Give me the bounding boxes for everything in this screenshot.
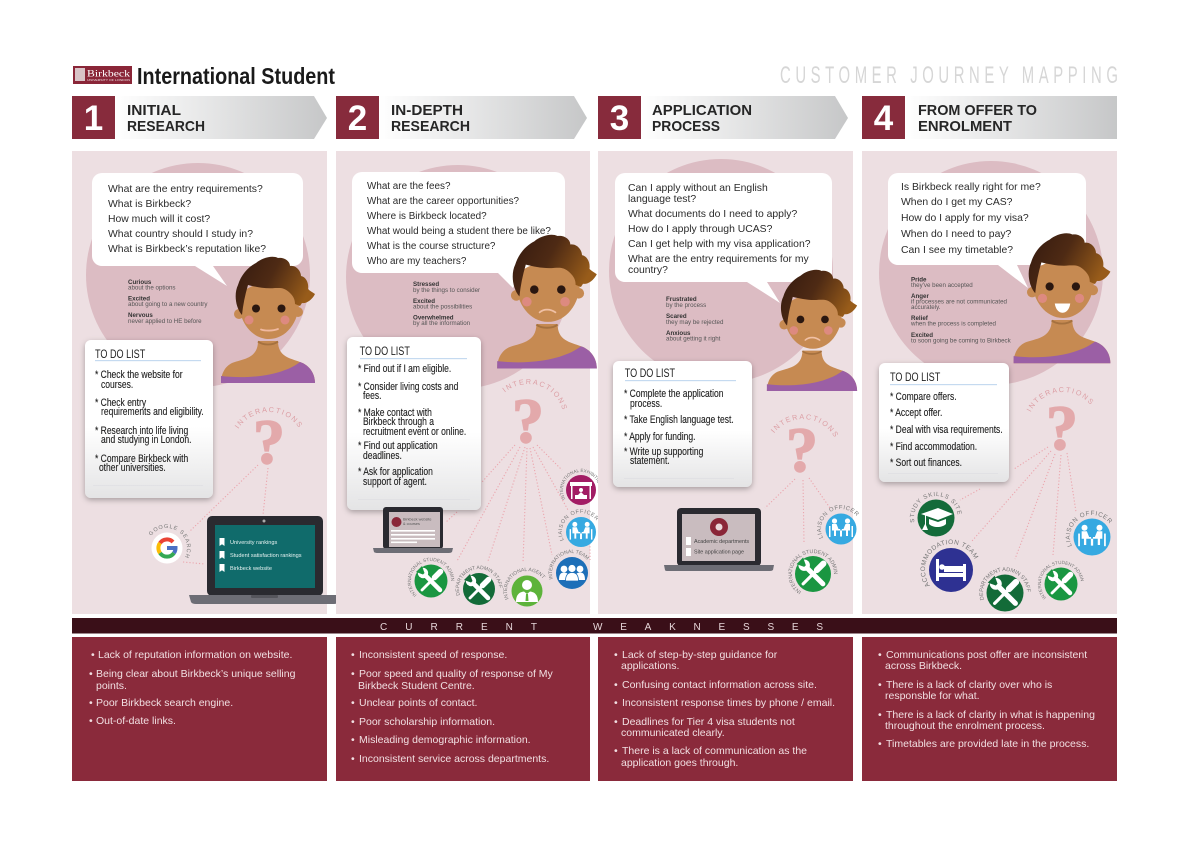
- to do list: Birkbeck through a: [363, 416, 435, 428]
- icon: international student admin: INTERNATIONAL STUDENT ADMIN: [1038, 560, 1084, 600]
- to do list: * Ask for application: [358, 466, 433, 478]
- interactions: [502, 379, 567, 456]
- step 3 header: [598, 96, 848, 139]
- weaknesses: application process: •: [614, 716, 618, 728]
- to do list: * Find out application: [358, 440, 438, 452]
- to do list: fees.: [363, 390, 381, 402]
- weaknesses: in-depth research: •: [351, 668, 355, 680]
- icon: department admin staff: DEPARTMENT ADMIN STAFF: [979, 567, 1031, 600]
- to do list: and studying in London.: [101, 434, 191, 446]
- weaknesses: application process: •: [614, 745, 618, 757]
- to do list: * Write up supporting: [624, 446, 703, 458]
- student: smiling: [221, 257, 315, 383]
- student: frowning: [497, 235, 597, 369]
- to do list: [879, 363, 1009, 482]
- to do list: * Make contact with: [358, 407, 432, 419]
- laptop: search results: [189, 516, 340, 604]
- weaknesses: from offer to enrolment: There is a lack of clarity in what is happening: [886, 709, 1095, 721]
- feelings: by the things to consider: [413, 287, 480, 294]
- speech bubble: questions: What are the fees?: [367, 181, 451, 192]
- step 1 header: INITIAL: [127, 102, 181, 119]
- to do list: * Check entry: [95, 397, 146, 409]
- to do list: * Sort out finances.: [890, 457, 962, 469]
- weaknesses: in-depth research: Poor scholarship information.: [359, 716, 495, 728]
- speech bubble: questions: language test?: [628, 194, 696, 205]
- interactions: ?: [512, 385, 544, 456]
- icon: international team: INTERNATIONAL TEAM: [548, 550, 590, 580]
- feelings: [910, 276, 1012, 344]
- speech bubble: questions: How much will it cost?: [108, 214, 210, 225]
- icon: study skills site: [910, 492, 962, 536]
- to do list: * Complete the application: [624, 388, 723, 400]
- feelings: about the options: [128, 284, 175, 292]
- icon: liaison officer: LIAISON OFFICER: [1066, 510, 1112, 547]
- weaknesses: initial research: •: [89, 715, 93, 727]
- to do list: [613, 361, 752, 487]
- step 1 header: [72, 96, 327, 139]
- feelings: by all the information: [413, 320, 471, 327]
- feelings: if processes are not communicated: [911, 298, 1008, 306]
- to do list: process.: [630, 398, 662, 410]
- speech bubble: questions: Is Birkbeck really right for me?: [901, 182, 1041, 193]
- weaknesses: from offer to enrolment: •: [878, 709, 882, 721]
- student: frowning: [767, 270, 857, 391]
- feelings: to soon going be coming to Birkbeck: [911, 338, 1012, 344]
- weaknesses: from offer to enrolment: There is a lack of clarity over who is: [886, 679, 1052, 691]
- laptop: application: [664, 508, 774, 571]
- icon: international agent: INTERNATIONAL AGENT: [504, 568, 546, 600]
- laptop: search results: Birkbeck website: [230, 566, 272, 572]
- panel: application process: [598, 151, 859, 614]
- interactions: [764, 414, 838, 542]
- laptop: website: [373, 507, 453, 553]
- weaknesses: application process: •: [614, 649, 618, 661]
- weaknesses: in-depth research: Unclear points of contact.: [359, 697, 477, 709]
- weaknesses: from offer to enrolment: across Birkbeck.: [885, 660, 962, 672]
- step 4 header: ENROLMENT: [918, 118, 1012, 135]
- band: current weaknesses: CURRENT: [380, 622, 537, 633]
- interactions: ?: [1046, 392, 1078, 463]
- logo: Birkbeck: UNIVERSITY OF LONDON: [87, 78, 130, 82]
- subtitle: CUSTOMER JOURNEY MAPPING: [780, 63, 1118, 89]
- to do list: TO DO LIST: [890, 372, 941, 384]
- speech bubble: questions: When do I need to pay?: [901, 229, 1012, 240]
- weaknesses: in-depth research: •: [351, 753, 355, 765]
- laptop: search results: Student satisfaction rankings: [230, 553, 302, 559]
- to do list: * Find accommodation.: [890, 441, 977, 453]
- weaknesses: from offer to enrolment: •: [878, 738, 882, 750]
- to do list: other universities.: [99, 462, 166, 474]
- step 2 header: 2: [348, 99, 367, 138]
- speech bubble: questions: What documents do I need to apply?: [628, 209, 797, 220]
- weaknesses: initial research: •: [89, 668, 93, 680]
- weaknesses: from offer to enrolment: •: [878, 649, 882, 661]
- feelings: they may be rejected: [666, 319, 724, 326]
- feelings: Excited: [911, 332, 933, 339]
- to do list: courses.: [101, 379, 133, 391]
- to do list: support of agent.: [363, 476, 427, 488]
- weaknesses: in-depth research: •: [351, 649, 355, 661]
- feelings: [413, 281, 480, 327]
- icon: international student admin: INTERNATIONAL STUDENT ADMIN: [408, 558, 454, 597]
- feelings: about going to a new country: [128, 301, 208, 308]
- laptop: application: Site application page: [694, 550, 744, 556]
- feelings: [666, 296, 724, 342]
- weaknesses: application process: •: [614, 679, 618, 691]
- weaknesses: in-depth research: •: [351, 716, 355, 728]
- feelings: by the process: [666, 302, 706, 309]
- speech bubble: questions: [888, 173, 1086, 288]
- weaknesses: in-depth research: Birkbeck Student Centre.: [358, 680, 475, 692]
- weaknesses: in-depth research: Inconsistent service across departments.: [359, 753, 549, 765]
- weaknesses: from offer to enrolment: throughout the enrolment process.: [885, 720, 1045, 732]
- speech bubble: questions: Can I see my timetable?: [901, 245, 1013, 256]
- weaknesses: application process: Inconsistent response times by phone / email.: [622, 697, 835, 709]
- interactions: [960, 387, 1094, 560]
- interactions: INTERACTIONS: [502, 379, 567, 410]
- step 1 header: RESEARCH: [127, 118, 205, 135]
- weaknesses: from offer to enrolment: responsble for what.: [885, 690, 980, 702]
- feelings: about the possibilities: [413, 304, 472, 310]
- weaknesses: initial research: [72, 637, 327, 781]
- weaknesses: application process: application goes through.: [621, 757, 738, 769]
- weaknesses: from offer to enrolment: •: [878, 679, 882, 691]
- interactions: INTERACTIONS: [1026, 387, 1094, 412]
- feelings: when the process is completed: [910, 320, 997, 328]
- to do list: statement.: [630, 455, 670, 467]
- to do list: * Research into life living: [95, 425, 188, 437]
- weaknesses: initial research: Poor Birkbeck search engine.: [96, 697, 233, 709]
- speech bubble: questions: country?: [628, 265, 668, 276]
- weaknesses: from offer to enrolment: [862, 637, 1117, 781]
- feelings: Overwhelmed: [413, 314, 454, 322]
- feelings: Anxious: [666, 330, 691, 337]
- speech bubble: questions: Can I get help with my visa application?: [628, 239, 811, 250]
- speech bubble: questions: [352, 172, 565, 288]
- feelings: [128, 279, 208, 325]
- panel: from offer to enrolment: [862, 151, 1117, 614]
- laptop: website: Birkbeck website: [403, 518, 432, 522]
- interactions: [183, 406, 302, 564]
- icon: study skills site: STUDY SKILLS SITE: [910, 492, 962, 522]
- laptop: website: & courses: [403, 522, 420, 526]
- speech bubble: questions: Can I apply without an English: [628, 183, 768, 194]
- weaknesses: from offer to enrolment: Timetables are provided late in the process.: [886, 738, 1089, 750]
- speech bubble: questions: What are the entry requirements for my: [628, 254, 810, 265]
- feelings: Relief: [911, 315, 929, 322]
- step 4 header: 4: [874, 99, 894, 138]
- panel: in-depth research: [336, 151, 598, 614]
- feelings: Pride: [911, 276, 927, 284]
- feelings: Scared: [666, 313, 687, 320]
- interactions: INTERACTIONS: [234, 407, 302, 428]
- weaknesses: in-depth research: Poor speed and quality of response of My: [359, 668, 554, 680]
- step 2 header: [336, 96, 587, 139]
- interactions: ?: [253, 406, 285, 477]
- to do list: TO DO LIST: [360, 346, 410, 358]
- speech bubble: questions: [615, 173, 832, 303]
- feelings: Anger: [911, 293, 929, 300]
- feelings: Curious: [128, 279, 152, 286]
- weaknesses: initial research: points.: [96, 680, 127, 692]
- icon: liaison officer: LIAISON OFFICER: [558, 509, 598, 542]
- weaknesses: initial research: •: [91, 649, 95, 661]
- weaknesses: application process: Lack of step-by-step guidance for: [622, 649, 778, 661]
- weaknesses: in-depth research: •: [351, 734, 355, 746]
- icon: liaison officer: LIAISON OFFICER: [817, 505, 859, 539]
- feelings: Excited: [128, 296, 150, 302]
- feelings: Stressed: [413, 281, 439, 288]
- speech bubble: questions: How do I apply for my visa?: [901, 213, 1029, 224]
- weaknesses: application process: Confusing contact information across site.: [622, 679, 817, 691]
- feelings: accurately.: [911, 304, 941, 311]
- laptop: search results: University rankings: [230, 540, 277, 546]
- to do list: * Deal with visa requirements.: [890, 424, 1003, 436]
- weaknesses: initial research: •: [89, 697, 93, 709]
- feelings: Frustrated: [666, 296, 697, 303]
- weaknesses: application process: There is a lack of communication as the: [622, 745, 807, 757]
- icon: international exhibition: INTERNATIONAL EXHIBITION: [560, 468, 598, 500]
- to do list: * Take English language test.: [624, 414, 734, 426]
- weaknesses: from offer to enrolment: Communications post offer are inconsistent: [886, 649, 1087, 661]
- panel: initial research: [72, 151, 336, 614]
- speech bubble: questions: Where is Birkbeck located?: [367, 211, 487, 222]
- weaknesses: in-depth research: Misleading demographic information.: [359, 734, 531, 746]
- weaknesses: in-depth research: [336, 637, 590, 781]
- feelings: Nervous: [128, 312, 153, 319]
- weaknesses: initial research: Lack of reputation information on website.: [98, 649, 292, 661]
- icon: international student admin: INTERNATIONAL STUDENT ADMIN: [788, 549, 838, 594]
- step 4 header: [862, 96, 1117, 139]
- step 3 header: PROCESS: [652, 118, 720, 135]
- step 3 header: 3: [610, 99, 629, 138]
- interactions: ?: [786, 414, 818, 485]
- speech bubble: questions: What is Birkbeck?: [108, 199, 191, 210]
- weaknesses: in-depth research: •: [351, 697, 355, 709]
- to do list: * Find out if I am eligible.: [358, 363, 451, 375]
- logo: Birkbeck: [73, 66, 132, 84]
- weaknesses: initial research: Out-of-date links.: [96, 715, 176, 727]
- to do list: requirements and eligibility.: [101, 406, 204, 418]
- to do list: * Compare Birkbeck with: [95, 453, 188, 465]
- band: current weaknesses: WEAKNESSES: [593, 622, 823, 633]
- weaknesses: application process: Deadlines for Tier 4 visa students not: [622, 716, 795, 728]
- speech bubble: questions: [92, 173, 303, 286]
- icon: department admin staff: DEPARTMENT ADMIN STAFF: [456, 566, 502, 596]
- to do list: * Consider living costs and: [358, 381, 458, 393]
- to do list: * Check the website for: [95, 369, 183, 381]
- feelings: Excited: [413, 298, 435, 305]
- feelings: never applied to HE before: [128, 318, 202, 325]
- student: happy: [1014, 233, 1110, 363]
- to do list: [347, 337, 481, 510]
- to do list: deadlines.: [363, 450, 402, 462]
- step 4 header: FROM OFFER TO: [918, 102, 1037, 119]
- interaction lines: [446, 445, 590, 563]
- band: current weaknesses: [72, 618, 1117, 634]
- speech bubble: questions: What are the entry requirements?: [108, 184, 263, 195]
- logo: Birkbeck: Birkbeck: [87, 70, 130, 80]
- weaknesses: application process: applications.: [621, 660, 679, 672]
- to do list: TO DO LIST: [95, 349, 146, 361]
- to do list: * Apply for funding.: [624, 431, 696, 443]
- speech bubble: questions: How do I apply through UCAS?: [628, 224, 773, 235]
- step 2 header: RESEARCH: [391, 118, 470, 135]
- to do list: * Compare offers.: [890, 391, 957, 403]
- speech bubble: questions: What is Birkbeck’s reputation like?: [108, 244, 266, 255]
- icon: accommodation team: ACCOMMODATION TEAM: [920, 540, 978, 586]
- speech bubble: questions: Who are my teachers?: [367, 256, 467, 267]
- to do list: [85, 340, 213, 498]
- speech bubble: questions: What country should I study in?: [108, 229, 253, 240]
- weaknesses: initial research: Being clear about Birkbeck’s unique selling: [96, 668, 296, 680]
- to do list: recruitment event or online.: [363, 426, 466, 438]
- icon: google search: GOOGLE SEARCH: [149, 524, 191, 558]
- weaknesses: application process: communicated clearly.: [621, 727, 725, 739]
- to do list: * Accept offer.: [890, 407, 942, 419]
- speech bubble: questions: When do I get my CAS?: [901, 197, 1013, 208]
- title: International Student: [137, 63, 335, 89]
- weaknesses: application process: [598, 637, 853, 781]
- step 1 header: 1: [84, 99, 103, 138]
- to do list: TO DO LIST: [625, 368, 676, 380]
- feelings: about getting it right: [666, 336, 721, 342]
- laptop: application: Academic departments: [694, 539, 749, 545]
- weaknesses: application process: •: [614, 697, 618, 709]
- feelings: they've been accepted: [911, 282, 973, 289]
- speech bubble: questions: What would being a student there be like?: [367, 226, 551, 237]
- step 2 header: IN-DEPTH: [391, 102, 463, 119]
- speech bubble: questions: What is the course structure?: [367, 241, 496, 252]
- weaknesses: in-depth research: Inconsistent speed of response.: [359, 649, 507, 661]
- interactions: INTERACTIONS: [770, 414, 838, 436]
- step 3 header: APPLICATION: [652, 102, 752, 119]
- speech bubble: questions: What are the career opportunities?: [367, 196, 520, 207]
